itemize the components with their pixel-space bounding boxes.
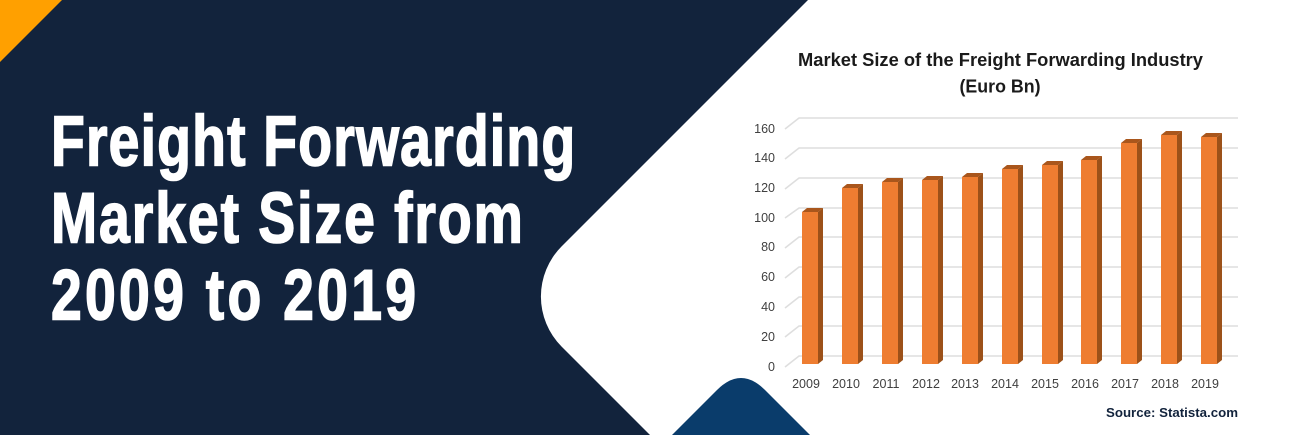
blue bottom shape <box>672 378 810 435</box>
x axis labels: 2013 <box>951 377 979 391</box>
y axis labels: 0 <box>768 360 775 374</box>
x axis labels: 2010 <box>832 377 860 391</box>
bar chart <box>754 118 1238 391</box>
source note: Source: Statista.com <box>1106 406 1238 420</box>
y axis labels: 40 <box>761 300 775 314</box>
x axis labels: 2015 <box>1031 377 1059 391</box>
x axis labels <box>792 377 1219 391</box>
y axis labels: 140 <box>754 151 775 165</box>
main title: 2009 to 2019 <box>51 256 416 335</box>
y axis labels: 60 <box>761 270 775 284</box>
x axis labels: 2009 <box>792 377 820 391</box>
main title: Freight Forwarding <box>51 102 575 181</box>
x axis labels: 2011 <box>873 377 899 391</box>
main title: Market Size from <box>51 179 523 258</box>
orange corner triangle <box>0 0 62 62</box>
y axis labels: 120 <box>754 181 775 195</box>
main title <box>51 102 575 335</box>
x axis labels: 2016 <box>1071 377 1099 391</box>
x axis labels: 2018 <box>1151 377 1179 391</box>
x axis labels: 2012 <box>912 377 940 391</box>
x axis labels: 2014 <box>991 377 1019 391</box>
y axis labels <box>754 122 775 374</box>
chart title <box>798 49 1204 96</box>
y axis labels: 100 <box>754 211 775 225</box>
y axis labels: 160 <box>754 122 775 136</box>
x axis labels: 2019 <box>1191 377 1219 391</box>
bars <box>802 131 1222 364</box>
chart title: Market Size of the Freight Forwarding Industry <box>798 49 1204 70</box>
y axis labels: 80 <box>761 240 775 254</box>
grid lines <box>785 118 1238 367</box>
y axis labels: 20 <box>761 330 775 344</box>
x axis labels: 2017 <box>1111 377 1139 391</box>
navy panel <box>0 0 808 435</box>
chart title: (Euro Bn) <box>960 76 1040 96</box>
